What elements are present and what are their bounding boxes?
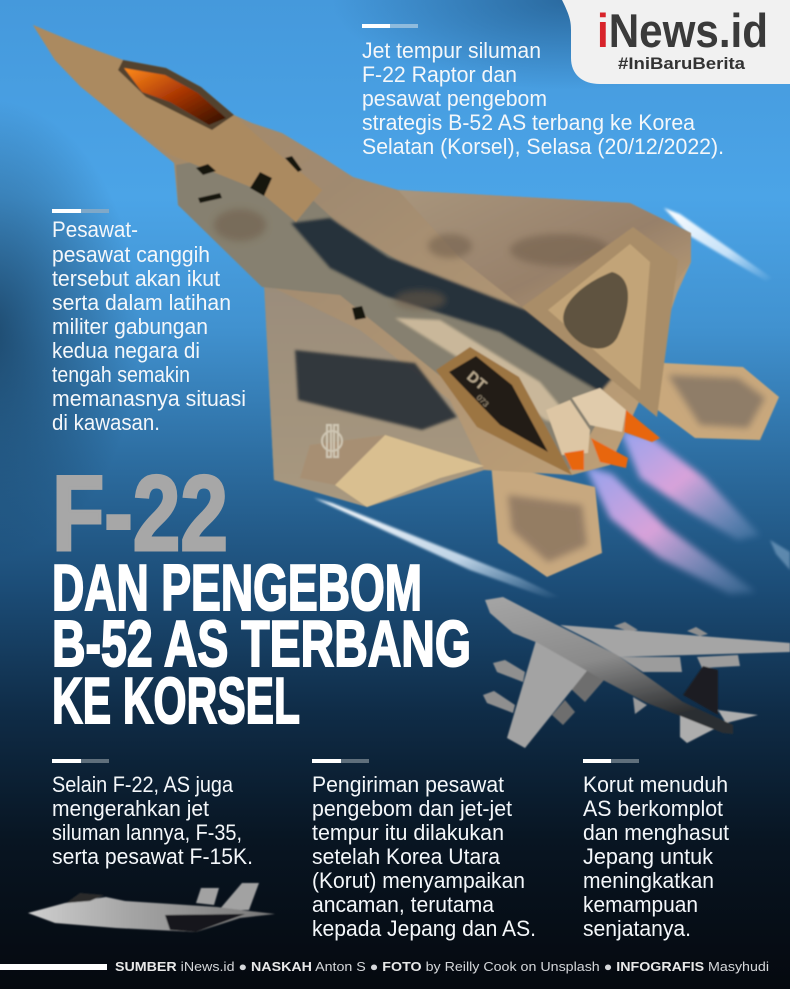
logo panel <box>562 0 790 84</box>
F-22 right horizontal stabiliser <box>655 363 779 440</box>
column 1 text <box>52 759 253 869</box>
footer credits: SUMBER iNews.id ● NASKAH Anton S ● FOTO by Reilly Cook on Unsplash ● INFOGRAFIS Masyhudi <box>115 959 769 974</box>
column 3 text <box>583 759 730 941</box>
F-22 left wing trailing flap <box>335 435 484 507</box>
F-22 national roundel <box>322 425 342 457</box>
top intro text block: Jet tempur siluman <box>362 38 541 63</box>
top intro text block: pesawat pengebom <box>362 86 547 111</box>
F-22 highlighted spine <box>395 318 580 430</box>
illustration: B-52 bomber <box>483 597 790 748</box>
F-22 lower horizontal stabiliser <box>491 463 602 577</box>
F-22 fuselage shadow band <box>291 218 615 392</box>
title: line 2: B-52 AS TERBANG <box>52 607 471 680</box>
column 2 text: tempur itu dilakukan <box>312 820 504 845</box>
column 2 text: ancaman, terutama <box>312 892 494 917</box>
main title <box>52 453 471 737</box>
column 3 text: kemampuan <box>583 892 698 917</box>
left text block: di kawasan. <box>52 410 160 435</box>
F-22 exhaust nozzles <box>546 388 660 470</box>
column 1 text: mengerahkan jet <box>52 796 210 821</box>
column 2 text: Pengiriman pesawat <box>312 772 505 797</box>
left text block: tersebut akan ikut <box>52 266 221 291</box>
F-22 ventral fin with DT tail code <box>436 347 572 475</box>
left text block: Pesawat- <box>52 217 138 242</box>
F-35 dark belly <box>165 914 245 932</box>
illustration: F-22 Raptor jet <box>33 25 779 577</box>
left text block: memanasnya situasi <box>52 386 246 411</box>
column 3 text: Korut menuduh <box>583 772 728 797</box>
left text block: serta dalam latihan <box>52 290 231 315</box>
left text block: kedua negara di <box>52 338 200 363</box>
F-35 fuselage <box>28 897 275 932</box>
column 3 text: meningkatkan <box>583 868 714 893</box>
F-22 lower tail edge flap <box>300 435 385 485</box>
F-22 left wing shadow <box>295 350 457 430</box>
column 3 text: AS berkomplot <box>583 796 724 821</box>
logo tagline: #IniBaruBerita <box>618 54 746 73</box>
F-22 intake vents <box>196 156 366 320</box>
top intro text block: F-22 Raptor dan <box>362 62 517 87</box>
F-35 tail fins <box>196 883 259 910</box>
title: line 3: KE KORSEL <box>52 664 300 737</box>
logo wordmark: iNews.id <box>597 4 768 57</box>
column 3 text: Jepang untuk <box>583 844 714 869</box>
F-22 wing patches <box>214 209 610 310</box>
left text block <box>52 209 246 435</box>
top intro text block <box>362 24 724 159</box>
B-52 engines <box>483 622 708 713</box>
column 2 text: pengebom dan jet-jet <box>312 796 513 821</box>
B-52 tail fin <box>683 666 718 715</box>
left text block: pesawat canggih <box>52 242 210 267</box>
F-22 cockpit canopy <box>118 60 234 130</box>
B-52 tail stabilisers <box>633 697 758 743</box>
engine plumes <box>585 430 760 594</box>
top intro text block: Selatan (Korsel), Selasa (20/12/2022). <box>362 134 724 159</box>
title: line 1: DAN PENGEBOM <box>52 551 422 624</box>
F-22 gray fuselage centre <box>176 150 610 470</box>
F-22 vertical tail fin <box>522 227 678 417</box>
contrails <box>314 208 790 598</box>
column 2 text <box>312 759 536 941</box>
column 3 text: senjatanya. <box>583 916 691 941</box>
top intro text block: strategis B-52 AS terbang ke Korea <box>362 110 695 135</box>
B-52 wing flaps <box>552 655 740 725</box>
F-22 right wing panel <box>398 190 691 330</box>
left text block: militer gabungan <box>52 314 208 339</box>
B-52 fuselage <box>485 597 733 734</box>
F-22 airframe silhouette <box>33 25 691 507</box>
column 2 text: kepada Jepang dan AS. <box>312 916 536 941</box>
F-22 left wing panel <box>264 283 484 507</box>
column 1 text: Selain F-22, AS juga <box>52 772 233 797</box>
illustration: F-35 jet <box>28 883 275 932</box>
column 2 text: (Korut) menyampaikan <box>312 868 525 893</box>
column 2 text: setelah Korea Utara <box>312 844 500 869</box>
F-22 ventral fin with DT tail code: DT <box>463 368 490 394</box>
F-35 canopy <box>66 893 104 903</box>
column 1 text: siluman lannya, F-35, <box>52 820 242 845</box>
column 1 text: serta pesawat F-15K. <box>52 844 253 869</box>
F-22 nose section <box>33 25 322 222</box>
B-52 wings <box>560 625 790 657</box>
title: F-22: F-22 <box>52 453 228 573</box>
left text block: tengah semakin <box>52 362 190 387</box>
column 3 text: dan menghasut <box>583 820 730 845</box>
F-22 ventral fin with DT tail code: 073 <box>475 393 491 409</box>
